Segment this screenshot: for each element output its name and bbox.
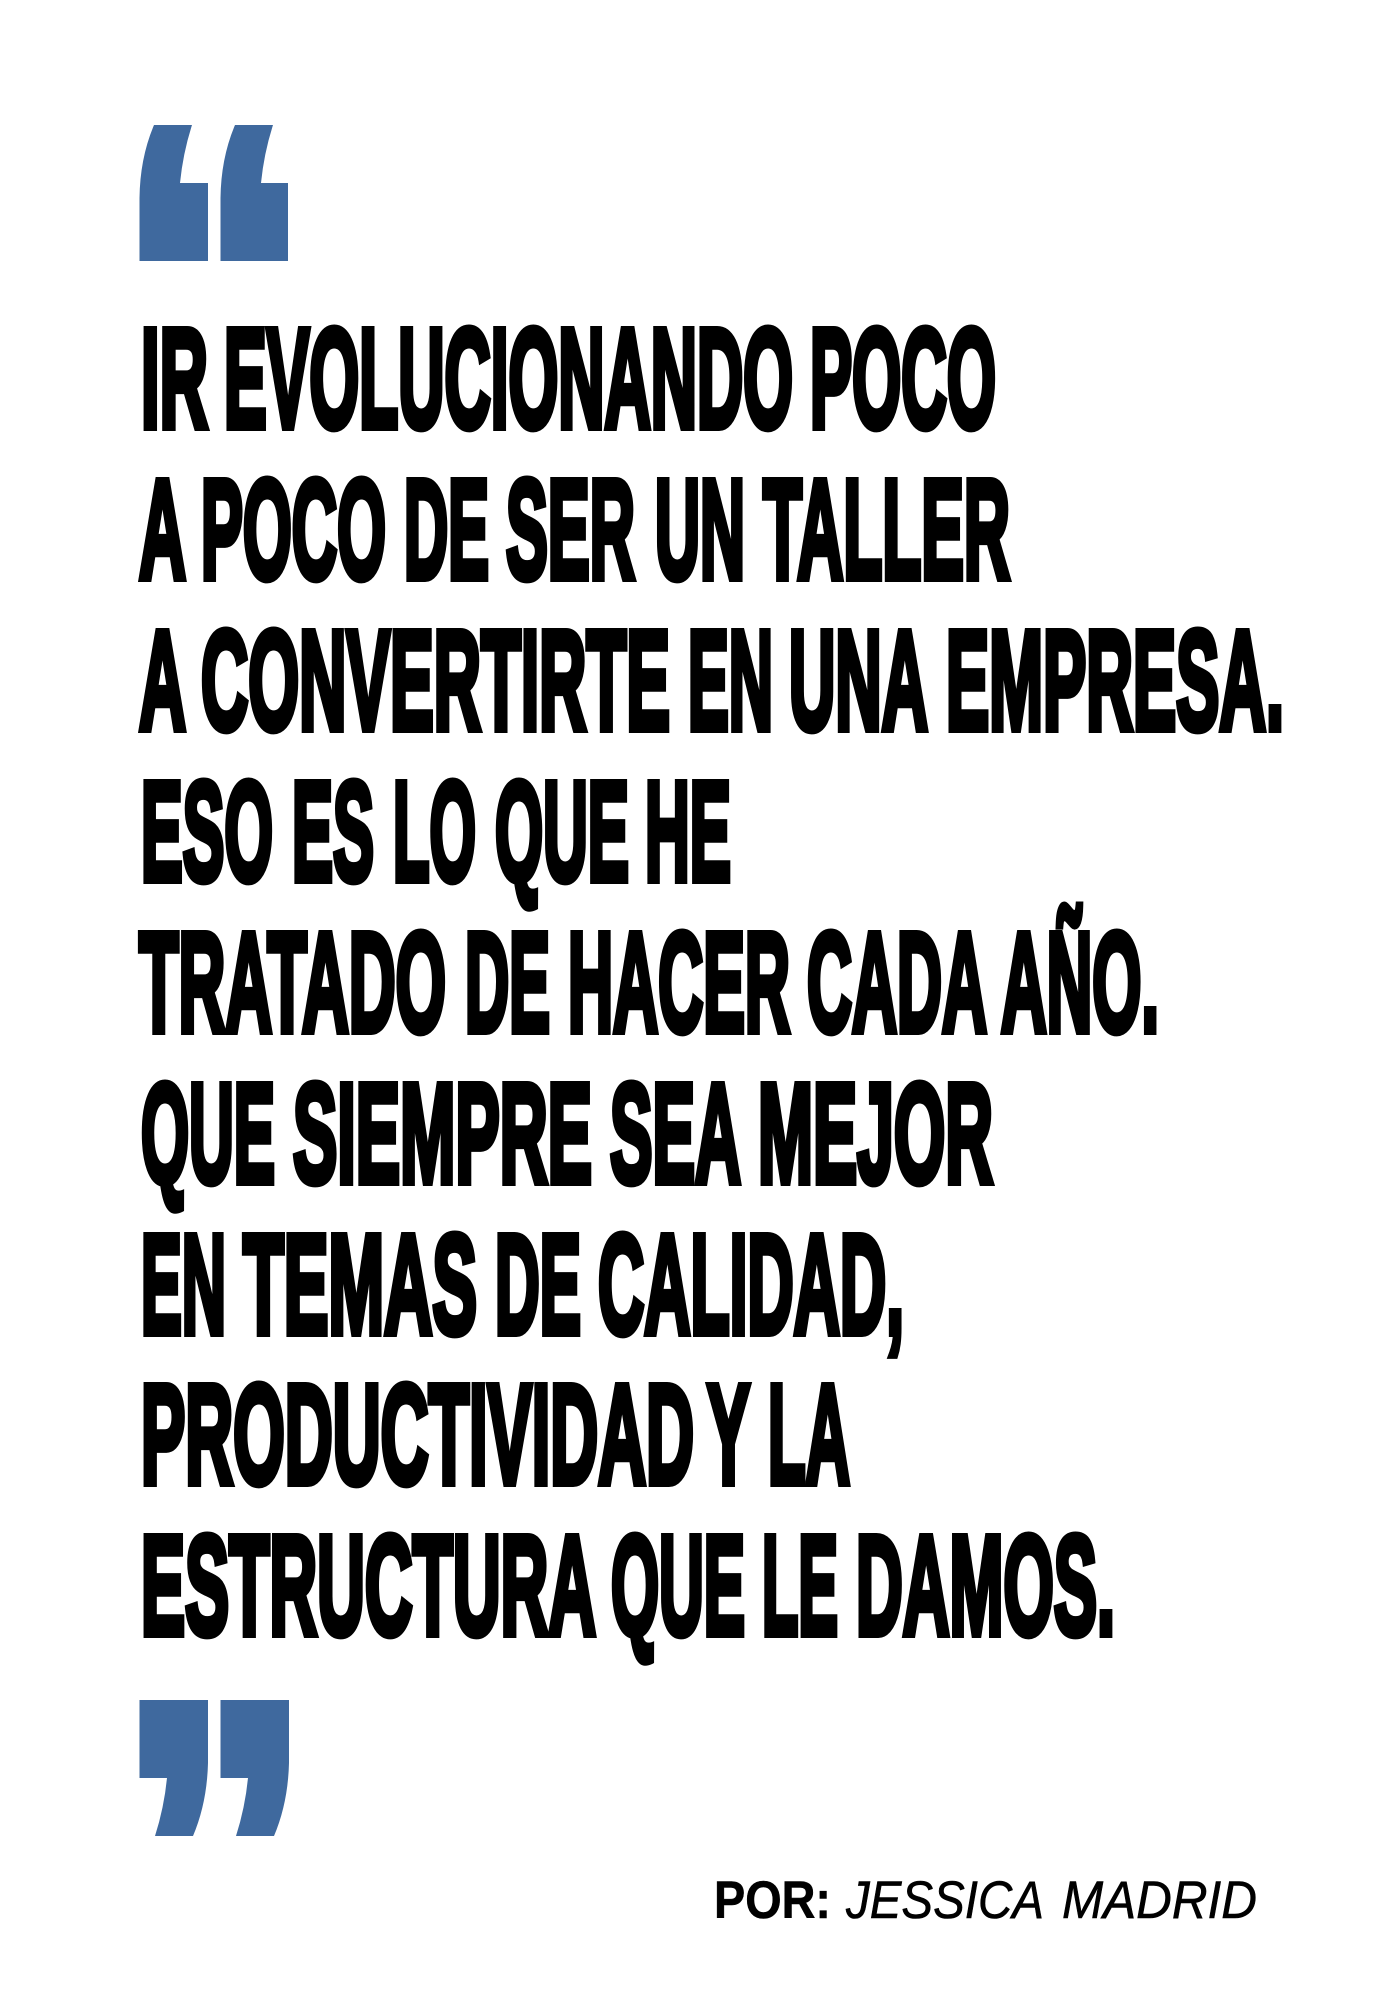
line 7	[141, 1205, 904, 1363]
line 5	[139, 903, 1159, 1061]
line 9: ESTRUCTURA	[141, 1506, 596, 1664]
quote text: CALIDAD,	[598, 1205, 904, 1363]
byline: POR:	[714, 1871, 831, 1930]
line 7: EN	[141, 1205, 226, 1363]
quote text: HE	[645, 752, 731, 910]
line 8	[141, 1355, 850, 1513]
line 5: HACER	[568, 903, 790, 1061]
line 8: PRODUCTIVIDAD	[141, 1355, 694, 1513]
icon: closing quotation marks	[140, 1700, 289, 1836]
line 4: QUE	[495, 752, 629, 910]
line 1: IR	[141, 299, 208, 457]
byline: MADRID	[1062, 1871, 1257, 1930]
line 5: DE	[465, 903, 550, 1061]
line 6: QUE	[141, 1054, 275, 1212]
line 6: SIEMPRE	[293, 1054, 592, 1212]
line 4: ES	[292, 752, 374, 910]
line 4: ESO	[141, 752, 273, 910]
byline	[714, 1871, 1257, 1930]
quote text: AÑO.	[1001, 903, 1159, 1061]
line 2: DE	[404, 450, 489, 608]
line 9: QUE	[611, 1506, 745, 1664]
line 2	[139, 450, 1010, 608]
line 6: SEA	[610, 1054, 741, 1212]
line 3: EN	[688, 601, 773, 759]
byline: JESSICA	[845, 1871, 1044, 1930]
line 2: POCO	[201, 450, 386, 608]
line 4	[141, 752, 731, 910]
line 3: CONVERTIRTE	[201, 601, 670, 759]
icon: opening quotation marks	[140, 125, 288, 261]
quote text: TALLER	[763, 450, 1010, 608]
line 2: UN	[655, 450, 745, 608]
line 3: UNA	[789, 601, 928, 759]
line 4: LO	[393, 752, 476, 910]
line 5: CADA	[807, 903, 987, 1061]
line 2: A	[139, 450, 186, 608]
line 5: TRATADO	[139, 903, 446, 1061]
line 8: Y	[707, 1355, 750, 1513]
line 3: A	[139, 601, 186, 759]
line 1	[141, 299, 996, 457]
quote text: LA	[768, 1355, 850, 1513]
line 9: LE	[762, 1506, 838, 1664]
line 2: SER	[506, 450, 635, 608]
line 7: DE	[495, 1205, 581, 1363]
quote text	[139, 299, 1284, 1664]
line 7: TEMAS	[243, 1205, 477, 1363]
quote text: MEJOR	[758, 1054, 993, 1212]
quote text: POCO	[810, 299, 996, 457]
